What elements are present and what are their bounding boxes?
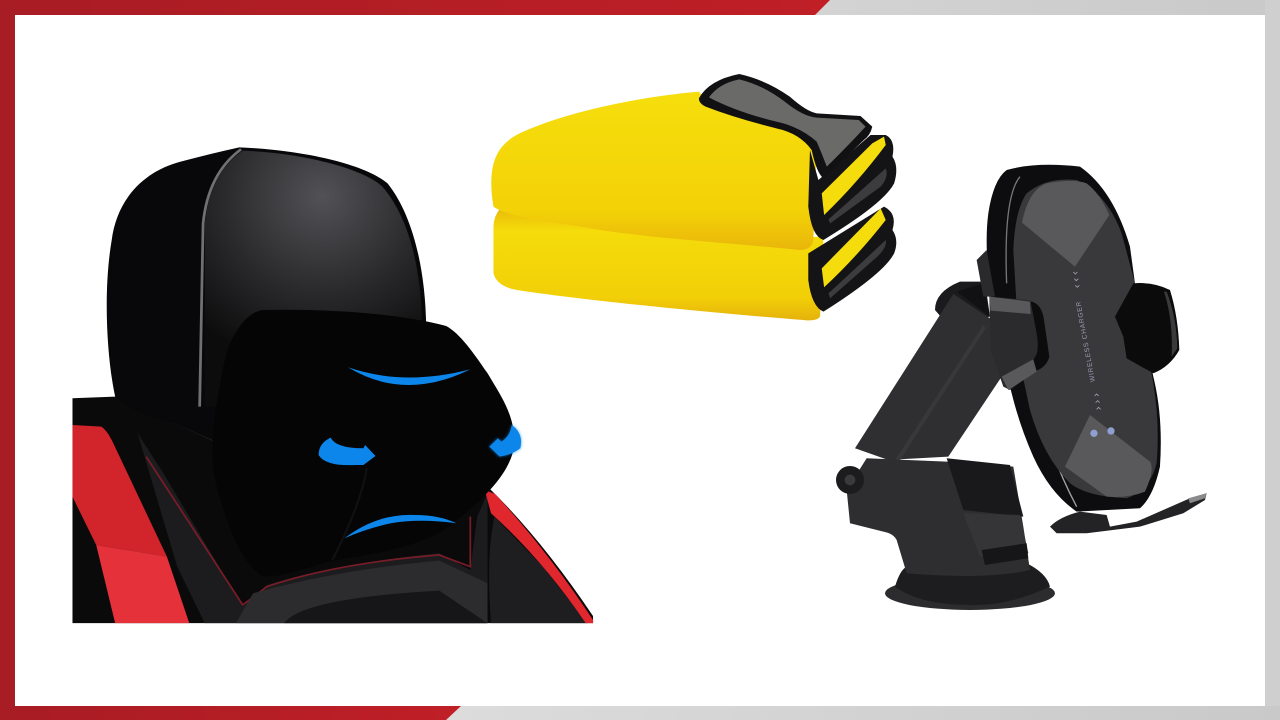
upper towel — [491, 92, 817, 250]
pillow — [212, 310, 513, 494]
phone cradle — [987, 165, 1161, 512]
telescopic arm — [855, 294, 1002, 460]
red stitching — [146, 457, 470, 605]
charging label: WIRELESS CHARGER — [1075, 300, 1097, 383]
chevrons — [1073, 272, 1101, 409]
headrest seam — [200, 149, 241, 407]
right seat panel — [489, 517, 588, 623]
headrest glossy panel — [204, 150, 422, 334]
suction base — [885, 563, 1055, 610]
headrest — [107, 147, 426, 440]
mount body — [847, 458, 1030, 576]
arm top knob — [935, 282, 990, 323]
left side clamp — [989, 297, 1049, 390]
right side clamp — [1115, 283, 1179, 373]
product: neck pillow on car seat — [72, 147, 598, 623]
seat lower panel — [236, 561, 488, 623]
red seat trim — [485, 490, 595, 623]
indicator lights — [1090, 427, 1115, 437]
lower foot — [1050, 493, 1207, 533]
seat bolster — [138, 433, 488, 623]
blue arrow marks — [319, 367, 521, 538]
lower towel — [493, 208, 823, 320]
pivot knob — [836, 466, 864, 494]
product: wireless car phone mount — [836, 165, 1207, 610]
lower towel edge — [808, 207, 896, 312]
upper towel edge — [808, 135, 896, 240]
cradle face — [1013, 179, 1158, 498]
product: yellow microfibre towels — [491, 74, 896, 320]
seat body — [72, 397, 598, 623]
ribbed clamp — [947, 458, 1023, 517]
grey fold — [699, 74, 872, 178]
red seat panel — [72, 425, 189, 623]
cradle facets — [1022, 181, 1109, 267]
